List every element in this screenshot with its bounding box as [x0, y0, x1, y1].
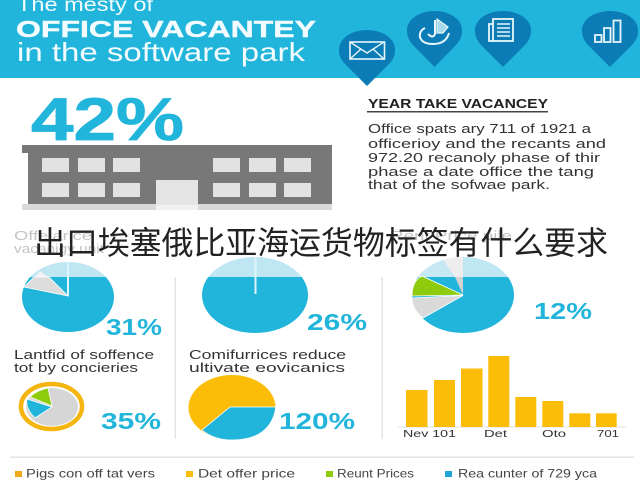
donut chart: 35% [21, 384, 82, 429]
bar chart axis labels: 701 [597, 428, 619, 440]
overlay banner text: 出口埃塞俄比亚海运货物标签有什么要求 [34, 218, 608, 264]
text block: year take vacancy: officerioy and the recants and [368, 136, 606, 151]
caption: middle: Comifurrices reduce [189, 347, 346, 362]
percent label 120%: 120% [279, 408, 355, 434]
pie chart: 120% [188, 375, 276, 440]
caption: left: Lantfid of soffence [14, 347, 154, 362]
text block: year take vacancy: phase a date office the tang [368, 164, 594, 179]
faded subheadings behind banner [14, 228, 512, 256]
percent label 35%: 35% [101, 408, 161, 434]
caption: left: tot by concieries [14, 360, 139, 375]
bar chart axis labels [403, 428, 619, 440]
percent label 31%: 31% [106, 314, 162, 340]
text block: year take vacancy: YEAR TAKE VACANCEY [368, 96, 548, 111]
text block: year take vacancy [367, 96, 606, 192]
text block: year take vacancy: Office spats ary 711 of 1921 a [368, 121, 592, 136]
bar chart axis labels: Det [484, 428, 507, 440]
caption: middle [189, 347, 346, 375]
icon: chart pin [407, 11, 462, 67]
caption: left [14, 347, 154, 375]
percent label 12%: 12% [534, 298, 592, 324]
dividers [10, 277, 634, 458]
bar chart [398, 356, 626, 440]
icon: office building [22, 145, 332, 210]
bar chart axis labels: Nev 101 [403, 428, 456, 440]
icon: document pin [475, 11, 531, 67]
icon: bars pin [582, 11, 638, 67]
big percentage: 42% [31, 86, 184, 153]
faded subheadings behind banner: Rent Price pile [390, 228, 512, 243]
bar chart axis labels: Oto [542, 428, 566, 440]
header band [0, 0, 640, 78]
caption: middle: ultivate eovicanics [189, 360, 346, 375]
pie chart: 31% [22, 262, 114, 332]
title: OFFICE VACANTEY [16, 16, 316, 42]
percent label 26%: 26% [307, 309, 367, 335]
faded subheadings behind banner: Offelarice [14, 228, 92, 243]
faded subheadings behind banner: vacanigy unit [14, 241, 104, 256]
text block: year take vacancy: that of the sofwae park. [368, 177, 550, 192]
legend [15, 466, 597, 480]
text block: year take vacancy: 972.20 recanoly phase of thir [368, 150, 601, 165]
icon: envelope pin [339, 30, 395, 86]
title: in the software park [17, 37, 306, 67]
pie chart: 12% [412, 257, 514, 333]
title [16, 0, 316, 67]
pie chart: 26% [202, 257, 308, 333]
